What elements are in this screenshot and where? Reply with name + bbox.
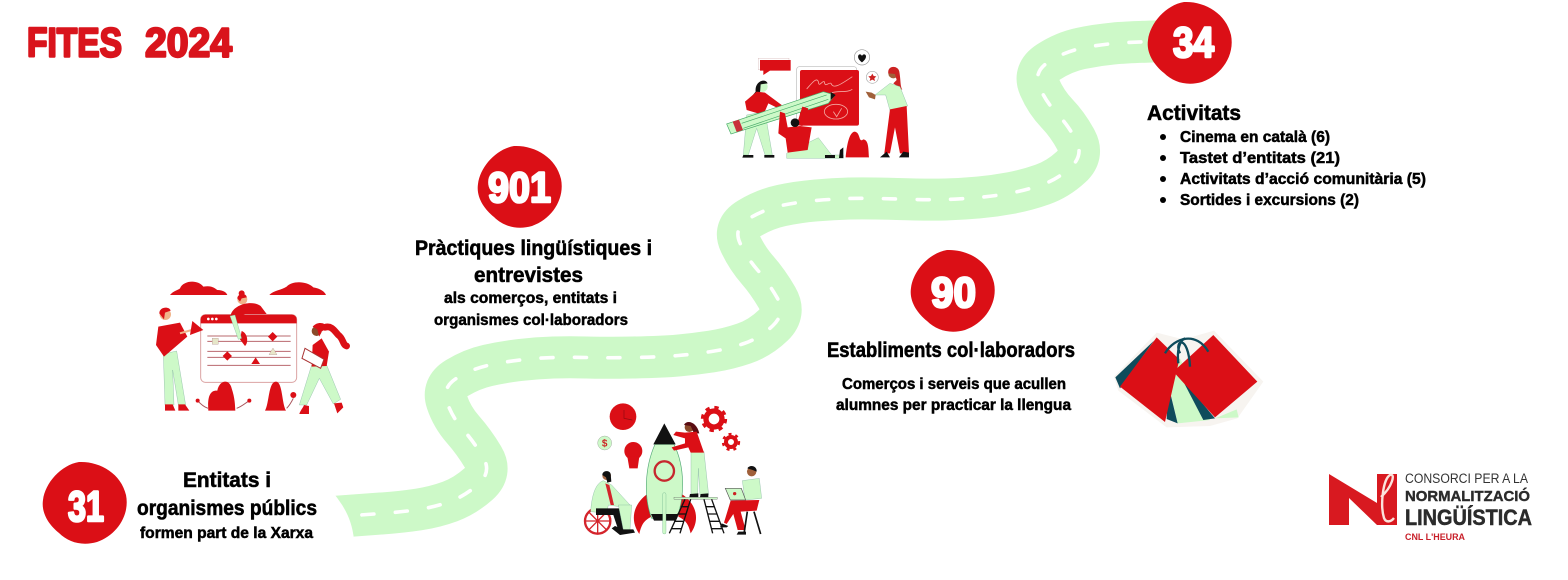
text: activitats list: [1147, 102, 1426, 209]
title: FITES: [27, 20, 122, 66]
text: establiments: Establiments col·laboradors: [827, 339, 1075, 362]
illustration: rocket team: [585, 403, 762, 535]
text: practiques: [415, 237, 652, 329]
text: practiques: entrevistes: [474, 264, 583, 287]
text: activitats list: Activitats d’acció comunitària (5): [1180, 171, 1426, 188]
milestone: 901 practiques: [415, 146, 652, 329]
logo text: [1405, 471, 1532, 543]
milestone: 31 entitats: [43, 462, 317, 544]
title: 2024: [145, 20, 232, 66]
badge 34: [1148, 2, 1232, 84]
badge 901: [478, 146, 562, 228]
text: entitats: [137, 469, 317, 542]
logo: [1329, 471, 1532, 543]
text: practiques: organismes col·laboradors: [434, 312, 628, 329]
badge 34: 34: [1173, 19, 1214, 67]
badge 901: 901: [488, 164, 551, 212]
text: establiments: alumnes per practicar la llengua: [836, 397, 1071, 414]
illustration: team with giant pencil: [727, 50, 909, 158]
illustration: rocket team: $: [602, 439, 608, 450]
text: establiments: [827, 339, 1075, 414]
road: [300, 41, 1170, 550]
text: activitats list: Sortides i excursions (2): [1180, 192, 1359, 209]
text: entitats: Entitats i: [183, 469, 271, 492]
title: [27, 20, 232, 66]
milestone: 90 establiments: [827, 250, 1075, 414]
text: entitats: formen part de la Xarxa: [140, 525, 313, 542]
illustration: team at web window: [156, 282, 347, 414]
top figure: [230, 290, 267, 339]
text: establiments: Comerços i serveis que acullen: [842, 376, 1066, 393]
badge 90: [911, 250, 995, 332]
text: entitats: organismes públics: [137, 497, 317, 520]
logo mark: [1329, 474, 1397, 525]
text: activitats list: Activitats: [1147, 102, 1241, 125]
text: practiques: Pràctiques lingüístiques i: [415, 237, 652, 260]
badge 31: 31: [68, 483, 104, 531]
badge 90: 90: [931, 269, 976, 317]
logo text: CNL L'HEURA: [1405, 532, 1465, 543]
text: activitats list: Tastet d’entitats (21): [1180, 150, 1340, 167]
badge 31: [43, 462, 127, 544]
logo text: CONSORCI PER A LA: [1405, 471, 1528, 486]
text: practiques: als comerços, entitats i: [444, 290, 617, 307]
logo text: NORMALITZACIÓ: [1405, 487, 1530, 505]
milestone: 34 activitats: [1147, 2, 1426, 209]
logo text: LINGÜÍSTICA: [1405, 505, 1532, 530]
text: activitats list: Cinema en català (6): [1180, 129, 1330, 146]
illustration: shopping bags: [1114, 331, 1263, 427]
